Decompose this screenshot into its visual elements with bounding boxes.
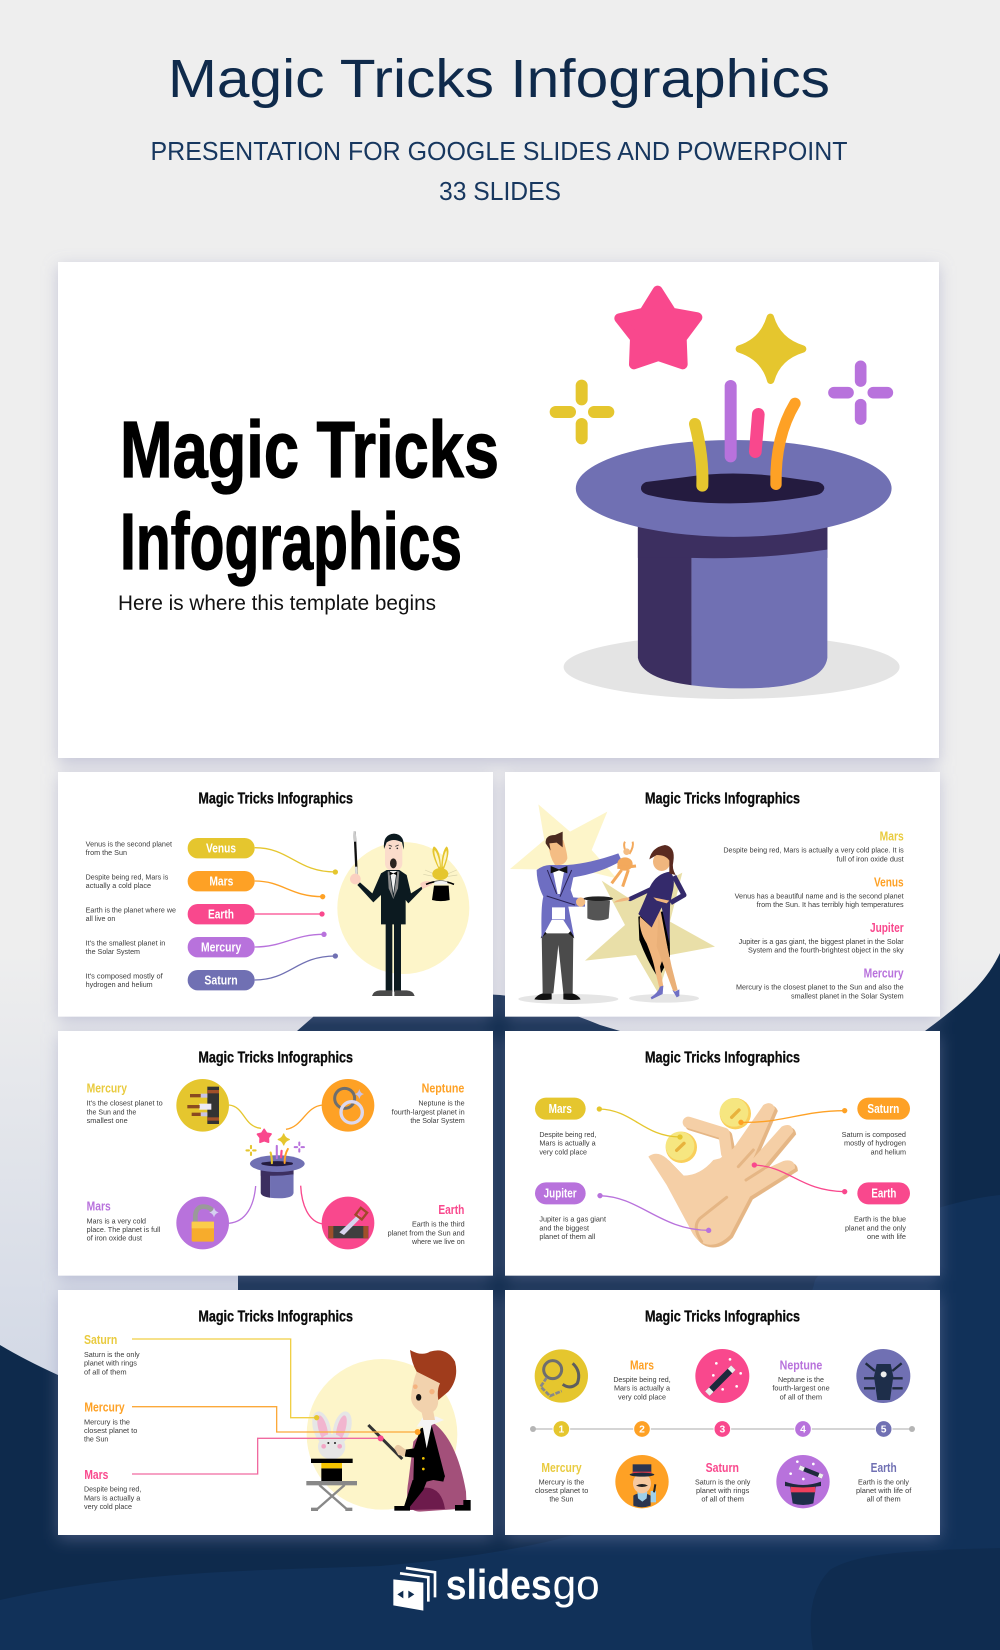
text: Neptune: fourth-largest planet in: [392, 1109, 465, 1116]
connector dots: [319, 869, 338, 959]
illustration: assistant woman: [613, 845, 699, 1003]
text: Jupiter: [739, 921, 904, 955]
text: Mercury: the Sun: [84, 1437, 108, 1444]
pill: Mars: [535, 1098, 586, 1120]
illustration: rabbit on table: [306, 1409, 357, 1511]
text: Mercury: smallest one: [87, 1118, 128, 1125]
text: Mercury: [84, 1401, 137, 1444]
timeline: 4: [800, 1425, 806, 1436]
text list: Earth is the planet where we: [86, 907, 176, 914]
logo wordmark: slides: [446, 1561, 552, 1608]
text: Neptune: Neptune is the: [778, 1377, 824, 1384]
text: Mars: Despite being red,: [84, 1487, 141, 1494]
text list: [86, 841, 176, 989]
pill: Saturn: [188, 970, 255, 990]
text: Mars: very cold place: [84, 1504, 132, 1511]
illustration: magic hat: [556, 291, 892, 688]
text: Venus: from the Sun. It has terribly high temperatures: [757, 902, 904, 909]
timeline: 3: [719, 1425, 725, 1436]
pill: Earth: Earth: [871, 1187, 896, 1201]
text: Saturn: Saturn is the only: [695, 1479, 751, 1486]
text: Earth: all of them: [867, 1497, 901, 1504]
text: Mars note: Despite being red,: [539, 1132, 596, 1139]
cover heading line two: Infographics: [120, 497, 462, 586]
text: Saturn: Saturn is the only: [84, 1352, 140, 1359]
pill: Mercury: [188, 937, 255, 957]
text: Earth: [856, 1461, 911, 1504]
text: Mars: [613, 1358, 671, 1401]
text: Earth: Earth: [438, 1203, 464, 1217]
slide shadows: [58, 266, 940, 1539]
panel: slide with magician and rabbit: [58, 1290, 493, 1535]
text: Venus: [735, 875, 904, 909]
icon: knives in box: [176, 1079, 229, 1132]
text: Mars: place. The planet is full: [87, 1227, 161, 1234]
timeline: 5: [881, 1425, 887, 1436]
slide heading: Magic Tricks Infographics: [645, 790, 800, 807]
text list: hydrogen and helium: [86, 982, 153, 989]
text: Mercury: closest planet to: [535, 1488, 588, 1495]
pill: Mars: Mars: [549, 1102, 572, 1116]
slide heading: Magic Tricks Infographics: [645, 1308, 800, 1325]
text list: actually a cold place: [86, 883, 151, 890]
icon: saw on box: [322, 1197, 374, 1249]
text: Mercury: the Sun and the: [87, 1109, 136, 1116]
icon: top hat with wand: [776, 1455, 830, 1508]
slide heading: Magic Tricks Infographics: [198, 1049, 353, 1066]
icon: magic wand: [695, 1349, 749, 1403]
cover tagline: Here is where this template begins: [118, 592, 436, 615]
slide heading: Magic Tricks Infographics: [645, 1049, 800, 1066]
text: Neptune: fourth-largest one: [772, 1386, 830, 1393]
text: Saturn: planet with rings: [696, 1488, 750, 1495]
text: Mars: Mars: [84, 1468, 108, 1482]
text: Saturn: Saturn: [706, 1461, 739, 1475]
text: Mercury: Mercury is the: [539, 1479, 584, 1486]
text: Jupiter note: Jupiter is a gas giant: [539, 1217, 606, 1224]
logo: slidesgo: [393, 1561, 600, 1611]
logo wordmark: go: [553, 1561, 600, 1608]
pill: Earth: Earth: [208, 908, 234, 922]
text: Earth: planet with life of: [856, 1488, 911, 1495]
text: Mars: of iron oxide dust: [87, 1236, 142, 1243]
text: Mars: Despite being red, Mars is actually a very cold place. It is: [723, 848, 904, 855]
pill: Saturn: Saturn: [204, 974, 238, 988]
pill: Mars: Mars: [209, 875, 233, 889]
text: Venus: Venus: [874, 875, 904, 889]
pill: Jupiter: [535, 1182, 586, 1204]
connector curves: [229, 1105, 323, 1224]
text: Neptune: Neptune is the: [418, 1101, 465, 1108]
text: Mercury: Mercury: [541, 1461, 582, 1475]
pill: Mercury: Mercury: [201, 941, 241, 955]
icon: slidesgo stacked pages: [393, 1568, 435, 1611]
timeline: [530, 1421, 915, 1437]
text: Earth: [388, 1203, 465, 1246]
subtitle: PRESENTATION FOR GOOGLE SLIDES AND POWERPOINT: [150, 136, 848, 166]
text list: Venus is the second planet: [86, 841, 172, 848]
text: Saturn: [695, 1461, 751, 1504]
text list: from the Sun: [86, 850, 127, 857]
text: Mars: Mars is actually a: [614, 1386, 670, 1393]
icon: handcuffs: [535, 1349, 588, 1403]
icon: linked rings: [322, 1079, 374, 1132]
background: bottom right blob: [811, 1548, 1000, 1650]
illustration: magician with wand and hat: [350, 832, 457, 996]
text: Jupiter: Jupiter is a gas giant, the biggest planet in the Solar: [739, 939, 904, 946]
text: Mercury: Mercury: [84, 1401, 125, 1415]
text: Jupiter note: planet of them all: [539, 1234, 596, 1241]
text: Saturn note: Saturn is composed: [842, 1132, 906, 1139]
text: Mars: Mars is actually a: [84, 1495, 140, 1502]
text: Mercury: [535, 1461, 588, 1504]
text: Jupiter note: and the biggest: [539, 1225, 589, 1232]
text: Saturn note: [842, 1132, 906, 1156]
text: Mars: Mars: [880, 830, 904, 844]
text list: It's composed mostly of: [86, 973, 163, 980]
text: Mars: [87, 1200, 161, 1243]
main title: Magic Tricks Infographics: [168, 49, 830, 109]
text: Mercury: Mercury is the closest planet to the Sun and also the: [736, 985, 904, 992]
panel: slide with hat and four icons: [58, 1031, 493, 1276]
illustration: magician man: [518, 832, 636, 1004]
connector dots: [597, 1106, 847, 1233]
illustration: central hat: [246, 1129, 305, 1198]
text: Saturn: of all of them: [84, 1369, 127, 1376]
text: Earth note: one with life: [867, 1234, 906, 1241]
pill: Earth: [857, 1182, 910, 1204]
text: Mercury: [87, 1082, 163, 1125]
pointer lines: [132, 1339, 418, 1474]
timeline: 2: [639, 1425, 645, 1436]
text list: all live on: [86, 916, 115, 923]
illustration: young magician: [368, 1350, 471, 1512]
text: Saturn note: and helium: [871, 1149, 906, 1156]
connector curves: [599, 1109, 845, 1230]
text: Mars note: Mars is actually a: [539, 1141, 596, 1148]
text: Mars: very cold place: [618, 1394, 666, 1401]
text list: It's the smallest planet in: [86, 940, 165, 947]
text list: the Solar System: [86, 949, 140, 956]
text: Mars: Mars: [87, 1200, 111, 1214]
text: Earth: where we live on: [411, 1239, 465, 1246]
cover heading line one: Magic Tricks: [120, 405, 499, 494]
pill: Saturn: Saturn: [867, 1102, 899, 1116]
text: Saturn: [84, 1333, 140, 1376]
text: Neptune: the Solar System: [410, 1118, 465, 1125]
icon: padlock: [176, 1197, 229, 1249]
text: Earth: planet from the Sun and: [388, 1230, 465, 1237]
slide count: 33 SLIDES: [439, 176, 561, 206]
pill: Earth: [188, 904, 255, 924]
text: Earth note: Earth is the blue: [854, 1217, 906, 1224]
text: Mars: [723, 830, 904, 863]
pill: Saturn: [857, 1098, 910, 1120]
text: Mars: [84, 1468, 141, 1511]
text: Neptune: of all of them: [780, 1394, 822, 1401]
text: Mars note: very cold place: [539, 1149, 587, 1156]
text: Jupiter: Jupiter: [870, 921, 904, 935]
icon: coffin with swords: [856, 1349, 910, 1403]
text: Mercury: [736, 967, 904, 1001]
pill: Venus: Venus: [206, 842, 236, 856]
panel: slide with magician and pills: [58, 772, 493, 1017]
text: Jupiter note: [539, 1217, 606, 1241]
text: Mercury: closest planet to: [84, 1428, 137, 1435]
panel: slide with hand and coins: [505, 1031, 940, 1276]
text list: Despite being red, Mars is: [86, 874, 169, 881]
illustration: cream circle: [337, 842, 469, 974]
text: Neptune: Neptune: [422, 1082, 464, 1096]
text: Mercury: Mercury: [87, 1082, 127, 1096]
illustration: background stars: [510, 804, 715, 993]
illustration: hand with coins: [648, 1098, 798, 1247]
text: Mars: Mars: [630, 1358, 654, 1372]
text: Mercury: smallest planet in the Solar System: [791, 994, 904, 1001]
panel: slide with stage duo and planet list: [505, 772, 940, 1017]
text: Saturn note: mostly of hydrogen: [844, 1141, 906, 1148]
background: lighter navy wave: [0, 1195, 1000, 1650]
text: Saturn: Saturn: [84, 1333, 117, 1347]
panel: cover slide: [58, 262, 939, 758]
hat shadow: [564, 635, 900, 699]
text: Mars: Mars is a very cold: [87, 1218, 146, 1225]
text: Earth note: [845, 1217, 907, 1241]
pointer dots: [314, 1415, 421, 1441]
illustration: cream circle: [307, 1359, 457, 1510]
timeline: 1: [558, 1425, 564, 1436]
text: Jupiter: System and the fourth-brightest object in the sky: [748, 948, 904, 955]
text: Mars: full of iron oxide dust: [837, 856, 904, 863]
text: Mars note: [539, 1132, 596, 1156]
connector lines: [255, 848, 335, 980]
text: Mercury: It's the closest planet to: [87, 1101, 163, 1108]
text: Earth: Earth is the third: [412, 1222, 465, 1229]
text: Mars: Despite being red,: [613, 1377, 671, 1384]
slide heading: Magic Tricks Infographics: [198, 1308, 353, 1325]
text: Neptune: [392, 1082, 465, 1125]
text: Mercury: Mercury is the: [84, 1419, 130, 1426]
text: Neptune: [772, 1358, 830, 1401]
text: Mercury: Mercury: [864, 967, 904, 981]
pill: Mars: [188, 871, 255, 891]
slide heading: Magic Tricks Infographics: [198, 790, 353, 807]
text: Saturn: planet with rings: [84, 1361, 138, 1368]
text: Earth: Earth: [871, 1461, 897, 1475]
icon: cartoon magician: [615, 1455, 669, 1508]
text: Venus: Venus has a beautiful name and is the second planet: [735, 893, 904, 900]
text: Neptune: Neptune: [780, 1358, 822, 1372]
text: Earth: Earth is the only: [858, 1479, 909, 1486]
text: Earth note: planet and the only: [845, 1225, 907, 1232]
pill: Jupiter: Jupiter: [544, 1187, 577, 1201]
text: Saturn: of all of them: [701, 1497, 744, 1504]
pill: Venus: [188, 838, 255, 858]
text: Mercury: the Sun: [549, 1497, 573, 1504]
panel: timeline slide: [505, 1290, 940, 1535]
